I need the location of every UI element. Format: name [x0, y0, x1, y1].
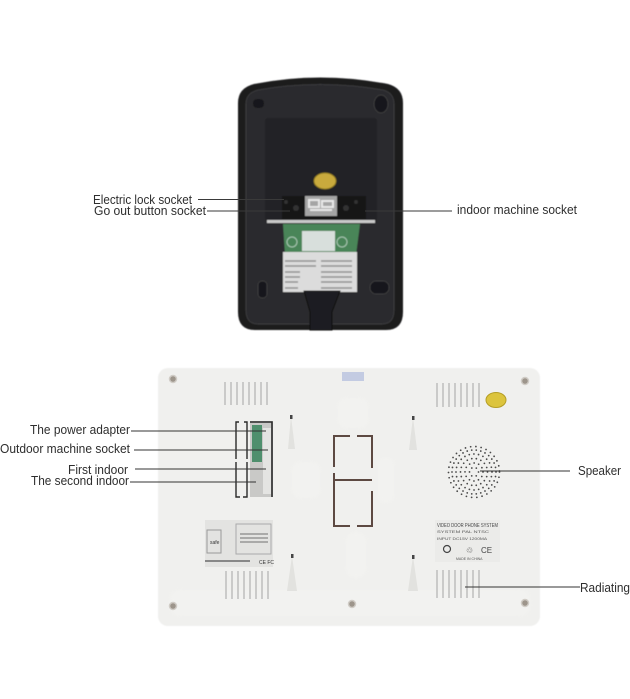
- diagram sticker: safe: [210, 540, 220, 546]
- connector brackets: [236, 422, 247, 497]
- rating sticker: SYSTEM PAL NTSC: [437, 530, 490, 534]
- callout: electric lock socket: Electric lock socket: [93, 192, 192, 207]
- callout: speaker: Speaker: [578, 463, 622, 478]
- moulded recesses: [170, 398, 530, 616]
- centre window openings: [334, 436, 372, 526]
- vent slots: [225, 382, 479, 599]
- rating sticker: INPUT DC15V 1200MA: [437, 537, 488, 541]
- wiring label: [283, 252, 357, 292]
- rating sticker: [435, 520, 500, 562]
- yellow warranty sticker: [486, 392, 506, 408]
- white strip: [267, 220, 375, 223]
- callout: the power adapter: The power adapter: [30, 422, 131, 437]
- rating sticker: CE: [481, 546, 492, 555]
- serial sticker: [342, 372, 364, 381]
- callout: indoor machine socket: indoor machine socket: [457, 202, 577, 217]
- callout: go out button socket: Go out button socket: [94, 203, 206, 218]
- callout: outdoor machine socket: Outdoor machine socket: [0, 441, 130, 456]
- yellow sticker: [314, 173, 336, 189]
- ribbon cable: [304, 291, 340, 330]
- rating sticker: VIDEO DOOR PHONE SYSTEM: [437, 523, 498, 529]
- mounting slots: [287, 415, 418, 591]
- speaker grille: [448, 446, 500, 498]
- connector block: [250, 421, 273, 497]
- rating sticker: MADE IN CHINA: [456, 557, 483, 561]
- diagram sticker: [205, 520, 274, 567]
- indoor monitor rear, black unit: [238, 78, 403, 330]
- corner screws: [170, 376, 528, 610]
- callout: the second indoor: The second indoor: [31, 473, 130, 488]
- callout: first indoor: First indoor: [68, 462, 129, 477]
- screw recesses: [253, 95, 389, 298]
- indoor monitor rear, white panel: [158, 368, 540, 626]
- green circuit board: [283, 224, 360, 255]
- rating sticker: ♲: [466, 546, 473, 555]
- wiring terminal: [282, 196, 366, 219]
- diagram sticker: CE FC: [259, 560, 274, 566]
- rear plate: [265, 118, 377, 221]
